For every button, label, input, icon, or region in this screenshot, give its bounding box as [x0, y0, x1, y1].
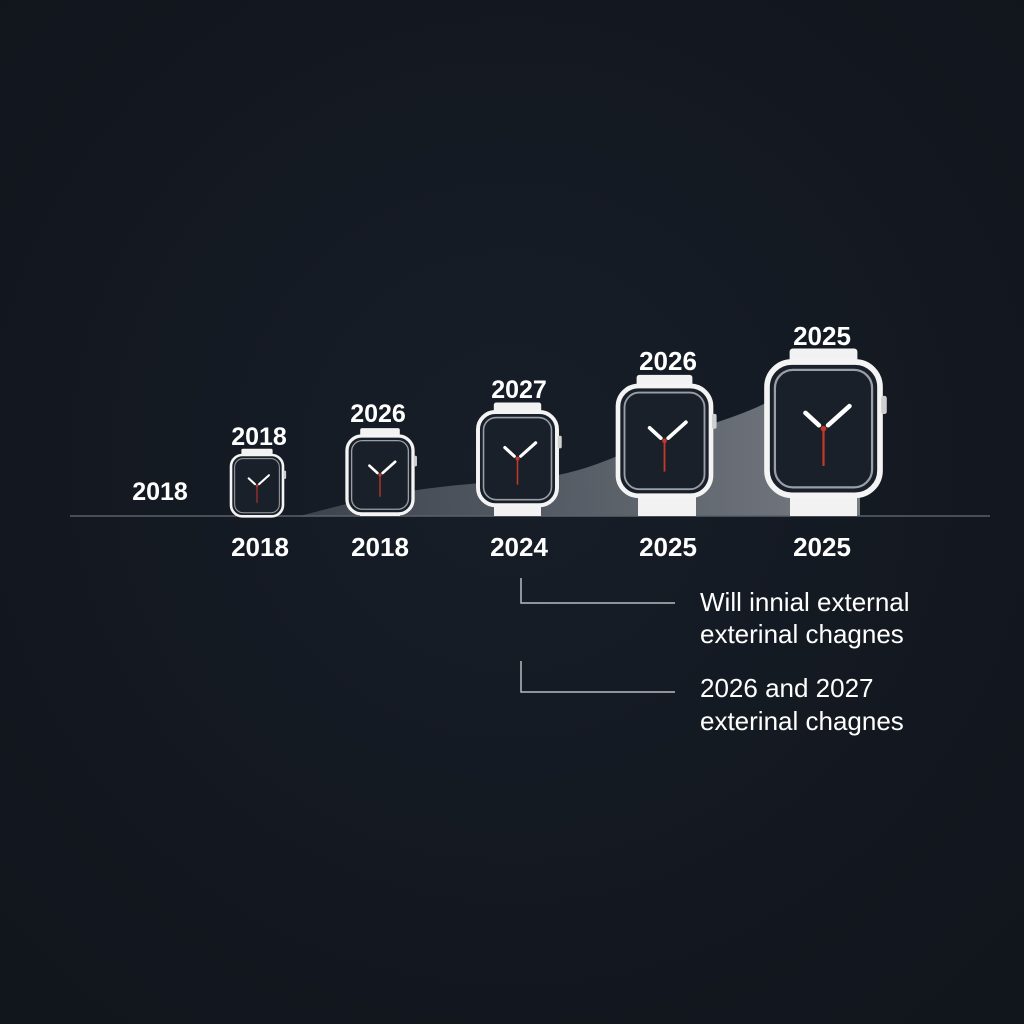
watch 1: [231, 423, 287, 516]
callout 1: [521, 578, 910, 649]
callout 2: 2026 and 2027: [700, 673, 874, 703]
left label: 2018: [132, 478, 188, 506]
bottom year labels: 2025: [639, 532, 697, 562]
bottom year labels: 2025: [793, 532, 851, 562]
watch 5: 2025: [793, 321, 851, 351]
bottom year labels: 2018: [351, 532, 409, 562]
callout 1: exterinal chagnes: [700, 619, 904, 649]
bottom year labels: [231, 532, 851, 562]
watch 4: 2026: [639, 346, 697, 376]
watch 4: [618, 346, 717, 516]
watch 3: 2027: [491, 376, 547, 404]
watch 3: [478, 376, 562, 516]
callout 1: Will innial external: [700, 587, 910, 617]
callout 2: exterinal chagnes: [700, 706, 904, 736]
growth area: [300, 380, 860, 516]
bottom year labels: 2018: [231, 532, 289, 562]
bottom year labels: 2024: [490, 532, 548, 562]
watch 2: [347, 400, 417, 516]
watch 2: 2026: [350, 400, 406, 428]
watch 1: 2018: [231, 423, 287, 451]
callout 2: [521, 661, 904, 736]
baseline: [70, 515, 990, 517]
watch 5: [767, 321, 887, 516]
